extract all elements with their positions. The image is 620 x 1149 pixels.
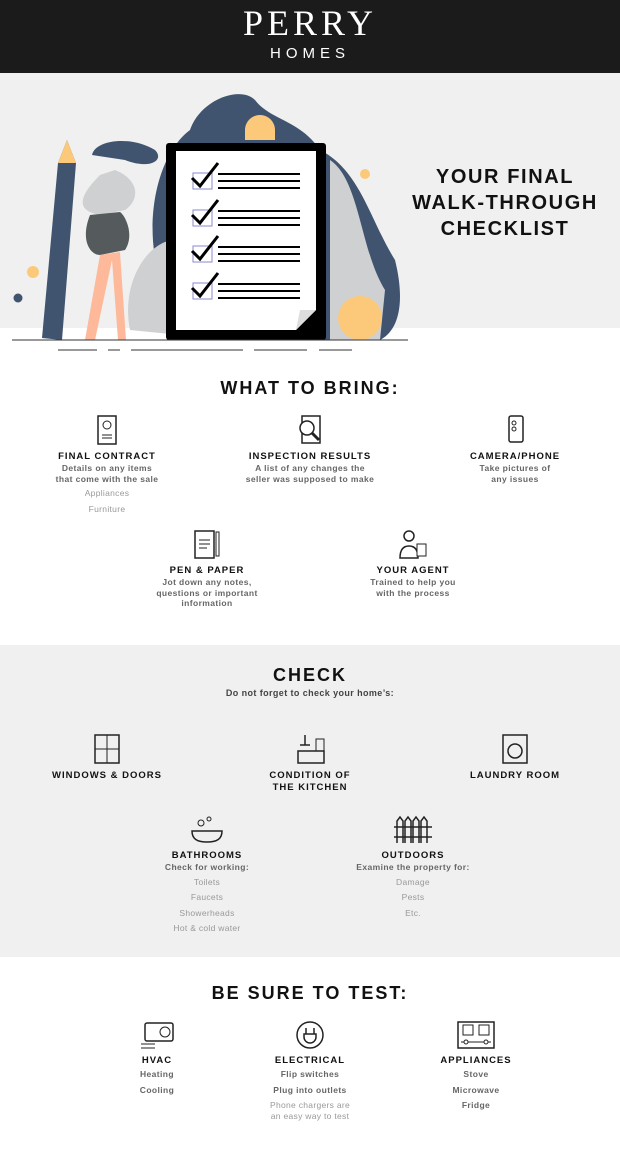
item: bathrooms: Check for working: [165, 862, 249, 872]
item: outdoors: Examine the property for: [356, 862, 470, 872]
item: your agent [370, 530, 456, 598]
item: electrical: ELECTRICAL [275, 1055, 345, 1066]
hero background [0, 73, 620, 328]
item: inspection results: A list of any changes the [255, 463, 365, 473]
item: appliances: Stove [463, 1069, 489, 1079]
hero title: YOUR FINAL [436, 166, 574, 188]
item: final contract: Appliances [85, 488, 129, 498]
item: outdoors: Pests [402, 892, 424, 902]
hero title: WALK-THROUGH [412, 192, 598, 214]
item: hvac: Heating [140, 1069, 174, 1079]
item: outdoors: Etc. [405, 908, 421, 918]
item: electrical: an easy way to test [271, 1110, 349, 1120]
item: inspection results: INSPECTION RESULTS [249, 451, 371, 462]
item: kitchen: CONDITION OF [269, 770, 351, 781]
item: outdoors: Damage [396, 876, 430, 886]
item: pen & paper: information [181, 598, 233, 608]
logo: PERRY [243, 3, 377, 43]
logo: HOMES [270, 45, 350, 62]
check section background [0, 645, 620, 957]
item: appliances: Microwave [452, 1084, 500, 1094]
check subtitle: Do not forget to check your home’s: [226, 688, 394, 698]
item: bathrooms: Hot & cold water [173, 923, 241, 933]
heading: be sure to test: BE SURE TO TEST: [212, 983, 408, 1003]
item: bathrooms: Faucets [191, 892, 223, 902]
item: hvac: Cooling [140, 1084, 174, 1094]
item: pen & paper: questions or important [156, 588, 258, 598]
item: camera/phone: CAMERA/PHONE [470, 451, 560, 462]
item: kitchen [269, 735, 351, 793]
item: camera/phone: Take pictures of [480, 463, 550, 473]
item: appliances: APPLIANCES [440, 1055, 512, 1066]
item: pen & paper: PEN & PAPER [170, 565, 244, 576]
hero illustration [12, 94, 408, 350]
item: hvac [140, 1022, 174, 1094]
item: appliances: Fridge [462, 1100, 490, 1110]
item: bathrooms: BATHROOMS [172, 850, 242, 861]
hero title: CHECKLIST [441, 218, 569, 240]
item: bathrooms: Toilets [194, 876, 220, 886]
heading: what to bring: WHAT TO BRING: [220, 378, 400, 398]
item: pen & paper: Jot down any notes, [162, 577, 252, 587]
item: kitchen: THE KITCHEN [273, 782, 347, 793]
item: inspection results [246, 415, 374, 484]
item: laundry: LAUNDRY ROOM [470, 770, 560, 781]
item: outdoors: OUTDOORS [382, 850, 444, 861]
item: final contract: FINAL CONTRACT [58, 451, 156, 462]
item: final contract [56, 415, 158, 514]
item: final contract: that come with the sale [56, 474, 158, 484]
item: laundry [470, 734, 560, 781]
header bar [0, 0, 620, 73]
item: final contract: Furniture [89, 504, 125, 514]
item: electrical [270, 1021, 350, 1120]
heading: check: CHECK [273, 665, 347, 685]
item: final contract: Details on any items [62, 463, 152, 473]
item: electrical: Phone chargers are [270, 1100, 350, 1110]
item: electrical: Flip switches [281, 1069, 339, 1079]
item: pen & paper [156, 530, 258, 608]
item: camera/phone [470, 415, 560, 484]
item: your agent: YOUR AGENT [376, 565, 449, 576]
item: outdoors [356, 816, 470, 918]
item: hvac: HVAC [142, 1055, 172, 1066]
item: windows & doors [52, 734, 162, 781]
item: appliances [440, 1021, 512, 1110]
item: bathrooms: Showerheads [179, 908, 235, 918]
item: windows & doors: WINDOWS & DOORS [52, 770, 162, 781]
logo [243, 3, 377, 62]
item: your agent: with the process [376, 588, 450, 598]
item: inspection results: seller was supposed to make [246, 474, 374, 484]
item: bathrooms [165, 816, 249, 933]
item: electrical: Plug into outlets [273, 1084, 347, 1094]
item: camera/phone: any issues [491, 474, 539, 484]
hero title [412, 166, 598, 240]
item: your agent: Trained to help you [370, 577, 456, 587]
